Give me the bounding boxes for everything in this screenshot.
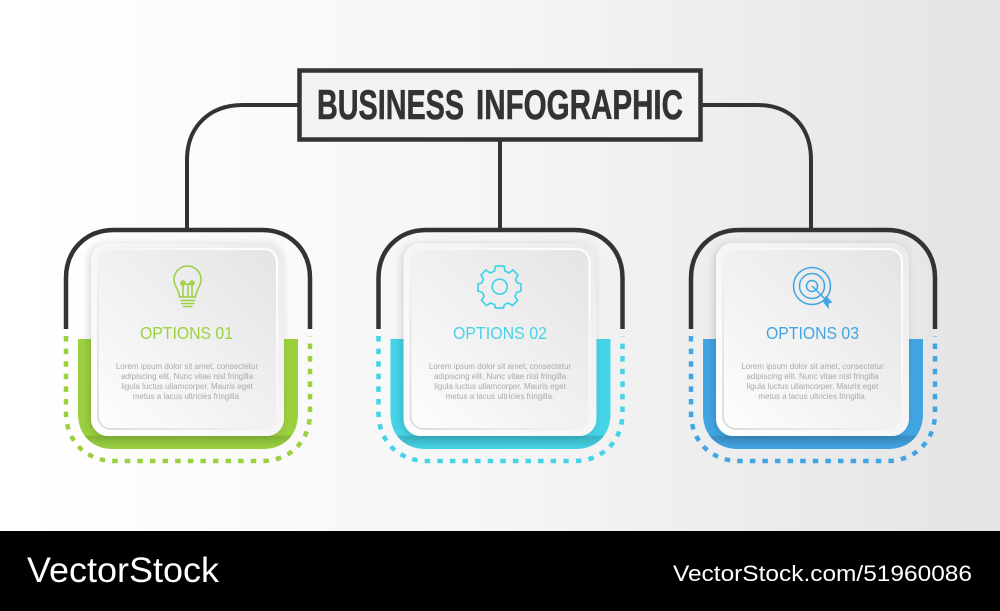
inner card <box>723 249 902 429</box>
footer bar <box>0 531 1000 611</box>
body text <box>741 362 884 401</box>
inner card <box>410 249 590 429</box>
heading: OPTIONS 02 <box>453 323 547 343</box>
icon: target with arrow <box>794 268 831 307</box>
card <box>404 243 596 436</box>
body text: metus a lacus ultricies fringilla. <box>133 392 241 401</box>
title box <box>300 70 700 140</box>
title box: BUSINESS <box>317 81 464 128</box>
body text: adipiscing elit. Nunc vitae nisl fringilla <box>121 372 254 381</box>
dashed outline <box>691 336 935 461</box>
card <box>91 243 284 436</box>
colored base <box>703 339 923 449</box>
body text: Lorem ipsum dolor sit amet, consectetur <box>429 362 571 371</box>
body text: adipiscing elit. Nunc vitae nisl fringilla <box>434 372 567 381</box>
body text: adipiscing elit. Nunc vitae nisl fringilla <box>746 372 879 381</box>
footer bar: VectorStock.com/51960086 <box>673 561 972 586</box>
dashed outline <box>66 336 310 461</box>
body text: metus a lacus ultricies fringilla. <box>446 392 554 401</box>
top outline <box>378 230 622 329</box>
title box: INFOGRAPHIC <box>476 81 683 128</box>
body text: Lorem ipsum dolor sit amet, consectetur <box>116 362 258 371</box>
heading: OPTIONS 01 <box>140 323 233 343</box>
colored base <box>78 339 298 449</box>
connector lines <box>187 105 811 229</box>
icon: light bulb <box>174 266 201 306</box>
top outline <box>691 230 935 329</box>
footer bar: VectorStock <box>27 551 220 590</box>
panel: options 03 <box>691 230 935 461</box>
heading: OPTIONS 03 <box>766 323 859 343</box>
body text <box>429 362 571 401</box>
inner card <box>98 249 277 429</box>
icon: gear <box>478 266 521 308</box>
card <box>716 243 909 436</box>
body text: Lorem ipsum dolor sit amet, consectetur <box>741 362 884 371</box>
colored base <box>390 339 610 449</box>
dashed outline <box>378 336 622 461</box>
panel: options 02 <box>378 230 622 461</box>
top outline <box>66 230 310 329</box>
body text: ligula luctus ullamcorper. Mauris eget <box>434 382 567 391</box>
body text <box>116 362 258 401</box>
body text: ligula luctus ullamcorper. Mauris eget <box>747 382 879 391</box>
panel: options 01 <box>66 230 310 461</box>
body text: ligula luctus ullamcorper. Mauris eget <box>121 382 254 391</box>
body text: metus a lacus ultricies fringilla. <box>758 392 867 401</box>
